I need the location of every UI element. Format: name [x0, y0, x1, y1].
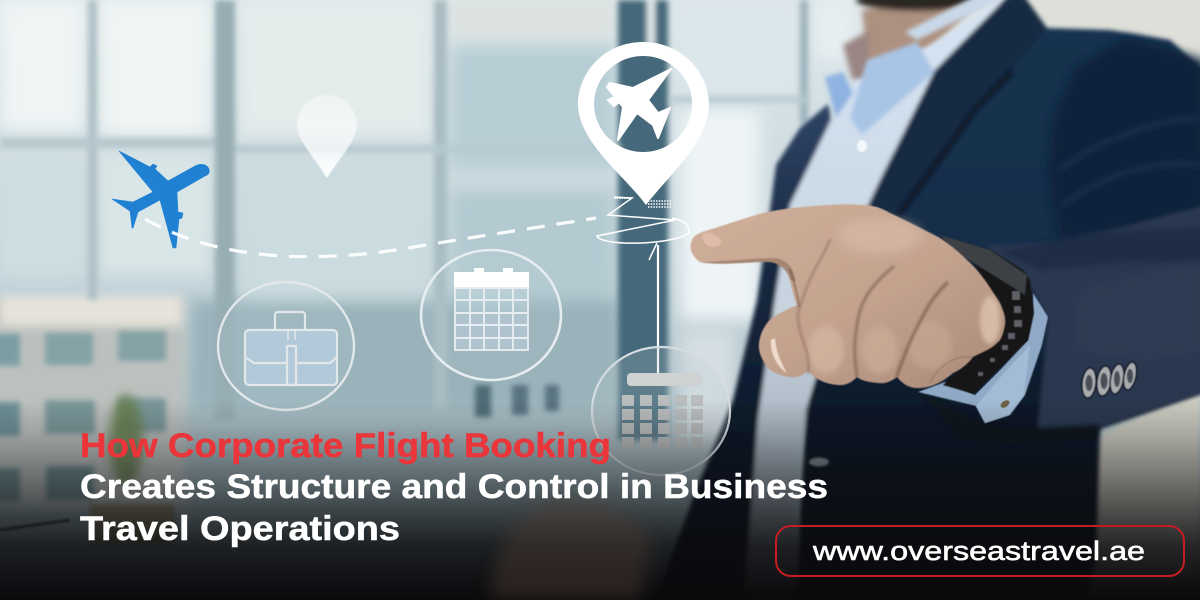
icon: briefcase in circle — [218, 282, 354, 410]
blurred left hand at bottom — [490, 500, 650, 600]
lapel — [860, 0, 1047, 270]
plant — [109, 394, 143, 486]
dashed flight path — [145, 218, 596, 257]
finger nail — [703, 233, 721, 247]
dark bottom gradient overlay — [0, 400, 1200, 600]
left jacket strip — [655, 104, 832, 600]
thumb highlight — [771, 338, 787, 373]
icon: white airplane — [607, 69, 671, 140]
title: Creates Structure and Control in Business — [80, 468, 828, 506]
businessman: shirt cuff, watch and sleeve buttons — [918, 235, 1139, 423]
jacket dark cuff edge — [920, 392, 1100, 444]
jacket button — [809, 458, 829, 466]
desk edge — [0, 520, 70, 530]
icon: faint location pin — [297, 95, 357, 178]
businessman: shirt and jacket — [655, 0, 1200, 600]
neck and beard — [843, 0, 985, 88]
top right wall — [1025, 0, 1200, 60]
website badge: www.overseastravel.ae — [812, 536, 1145, 566]
icon: large location pin with airplane — [578, 42, 709, 205]
sleeve — [985, 205, 1200, 432]
building across the street — [0, 296, 185, 506]
right jacket front — [796, 0, 1200, 600]
businessman: pointing hand — [690, 204, 1005, 388]
icon: blue airplane — [112, 151, 209, 248]
icon: spiral target and vertical arrow — [597, 197, 689, 373]
icon: keypad in circle — [592, 347, 730, 475]
icon: sleeve buttons — [1080, 361, 1139, 399]
title: How Corporate Flight Booking — [80, 427, 611, 465]
collar — [905, 0, 1008, 40]
shirt — [745, 0, 1008, 600]
watch strap — [940, 236, 1034, 394]
icon: calendar in circle — [421, 250, 561, 380]
website badge — [776, 526, 1184, 576]
shoulder shading — [1048, 37, 1200, 240]
finger shading — [700, 258, 796, 282]
title: Travel Operations — [80, 510, 400, 548]
title — [80, 427, 828, 548]
background right of sleeve — [1090, 385, 1200, 600]
